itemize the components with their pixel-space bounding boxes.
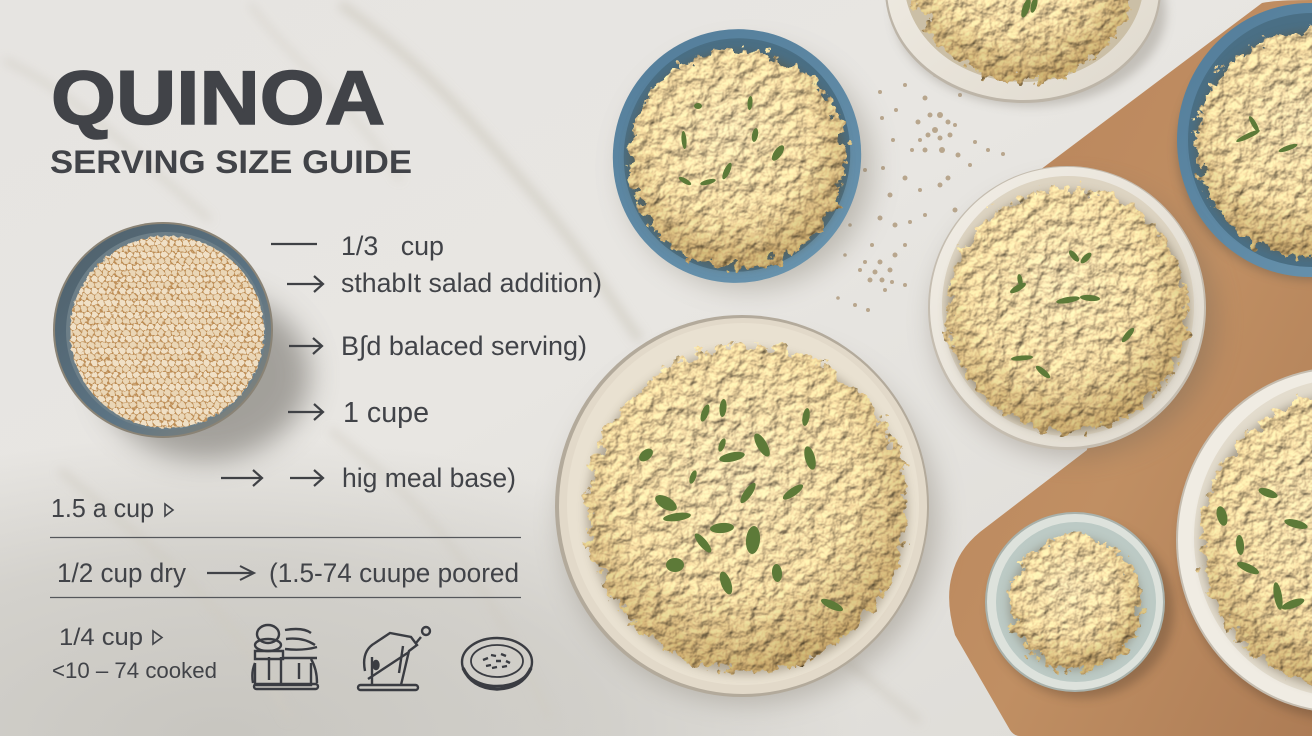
row: 1/4 cup: <10 – 74 cooked [52, 658, 217, 683]
bowl: white, right centre [928, 166, 1215, 455]
icon: plate of grains [462, 638, 532, 689]
row: 1/4 cup: 1/4 cup [59, 624, 143, 651]
label: balanced serving: B∫d balaced serving) [341, 331, 587, 361]
label: meal base: hig meal base) [342, 463, 516, 493]
line: 1/3 cup [271, 243, 317, 245]
label: 1 cup: 1 cupe [343, 397, 429, 429]
subtitle: SERVING SIZE GUIDE [50, 144, 412, 180]
title: QUINOA [51, 56, 385, 141]
arrow: salad addition [287, 276, 323, 292]
label: salad addition: sthabIt salad addition) [341, 268, 602, 298]
icon: measuring jars [252, 625, 318, 689]
bowl: large centre [555, 315, 938, 702]
dry quinoa bowl [53, 222, 310, 460]
arrow: 1 cup [288, 404, 323, 420]
row: 1.5 cup: 1.5 a cup [51, 493, 154, 523]
row: 1/4 cup [52, 624, 217, 683]
double arrow: meal base [221, 470, 323, 486]
row: 1/2 cup dry [57, 558, 519, 588]
bowl: white, lower right [1176, 367, 1312, 720]
label: 1/3 cup: 1/3 cup [341, 231, 444, 261]
bowl: top centre [885, 0, 1166, 106]
row: 1/2 cup dry: 1/2 cup dry [57, 558, 186, 588]
bowl: small, bottom right [985, 512, 1174, 698]
row: 1/2 cup dry: (1.5-74 cuupe poored [269, 558, 519, 588]
wooden cutting board [949, 0, 1312, 736]
arrow: balanced serving [289, 338, 322, 354]
bowl: blue, far right [1177, 3, 1312, 280]
icon: cutting board with herbs [358, 627, 430, 690]
spilled quinoa grains [836, 73, 1005, 312]
bowl: blue, upper centre [586, 3, 888, 309]
serving list [221, 231, 602, 493]
